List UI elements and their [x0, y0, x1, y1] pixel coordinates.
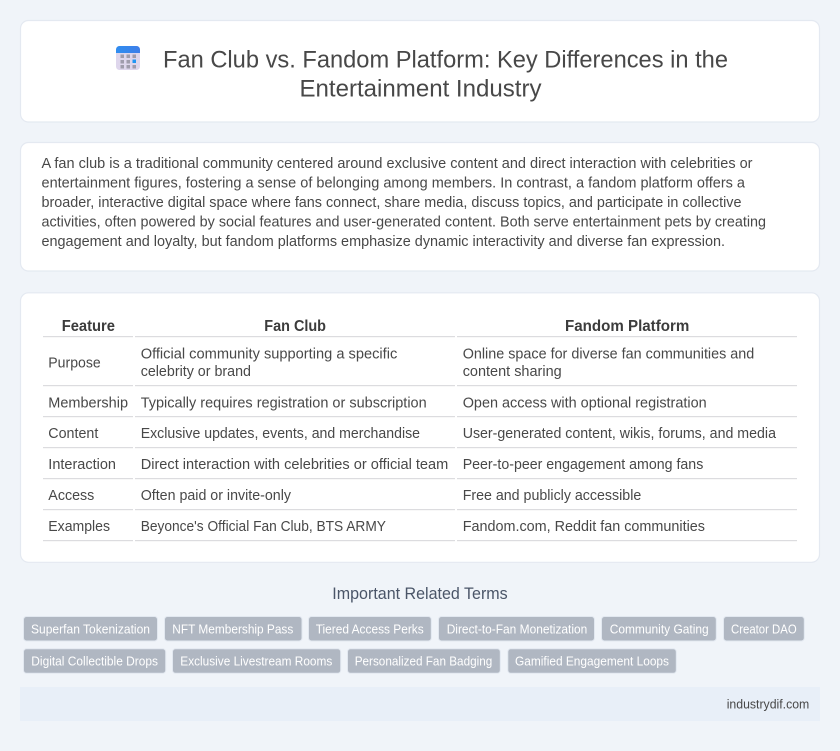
row: examples: Fandom.com, Reddit fan communities: [463, 518, 705, 535]
row: membership: Typically requires registration or subscription: [141, 394, 427, 411]
icon: calendar: [116, 46, 140, 70]
tag: Digital Collectible Drops: [31, 653, 158, 668]
row: membership: Open access with optional registration: [463, 394, 707, 411]
text block: introduction: activities, often powered by social features and user-generated content. Both serve entertainment pets by creating: [42, 214, 766, 230]
tag: Tiered Access Perks: [316, 621, 424, 636]
row: purpose: content sharing: [463, 363, 562, 380]
row: content: Content: [48, 425, 99, 442]
title: Entertainment Industry: [300, 76, 542, 102]
title: [163, 46, 728, 102]
panel: comparison table: [20, 293, 820, 562]
tag: [172, 649, 341, 673]
tag: Personalized Fan Badging: [355, 653, 492, 668]
tag list: related terms: [24, 616, 804, 673]
tag: Community Gating: [610, 621, 709, 636]
tag: [724, 616, 804, 641]
tag: [24, 649, 166, 673]
text block: introduction: [42, 155, 766, 250]
text block: introduction: entertainment figures, fostering a sense of belonging among members. In contrast, a fandom platform offers a: [42, 174, 746, 192]
row: access: Often paid or invite-only: [141, 487, 291, 504]
row: purpose: [48, 345, 754, 380]
table header row: Feature: [62, 318, 115, 335]
row: purpose: Official community supporting a specific: [141, 345, 398, 362]
tag: NFT Membership Pass: [172, 621, 293, 636]
row: examples: Beyonce's Official Fan Club, BTS ARMY: [141, 518, 386, 535]
tag: [508, 649, 676, 673]
tag: Exclusive Livestream Rooms: [180, 653, 332, 668]
table header row: Fan Club: [264, 318, 326, 335]
text block: introduction: engagement and loyalty, but fandom platforms emphasize dynamic interactivity and diverse fan expression.: [42, 233, 725, 250]
row: interaction: Interaction: [48, 456, 116, 473]
row: interaction: Peer-to-peer engagement among fans: [463, 456, 703, 473]
panel: introduction: [20, 142, 820, 271]
row: examples: [48, 518, 705, 535]
tag: [438, 616, 594, 641]
row: purpose: celebrity or brand: [141, 363, 251, 380]
row: access: [48, 487, 641, 504]
row: content: User-generated content, wikis, forums, and media: [463, 425, 777, 442]
row: membership: Membership: [48, 394, 128, 411]
row: access: Access: [48, 487, 94, 504]
table header row: Fandom Platform: [565, 318, 689, 335]
tag: [602, 616, 716, 641]
tag: [24, 616, 158, 641]
footer: [20, 687, 820, 721]
tag: Gamified Engagement Loops: [515, 653, 669, 668]
text block: introduction: broader, interactive digital space where fans connect, share media, discuss topics, and participate in collective: [42, 194, 742, 211]
row: access: Free and publicly accessible: [463, 487, 641, 504]
row: membership: [48, 394, 707, 411]
tag: [164, 616, 302, 641]
row: interaction: Direct interaction with celebrities or official team: [141, 456, 448, 473]
panel: header: [20, 20, 820, 122]
row: content: [48, 425, 777, 442]
tag: [308, 616, 431, 641]
tag: Direct-to-Fan Monetization: [447, 621, 587, 636]
row: purpose: Purpose: [48, 354, 101, 371]
row: interaction: [48, 456, 703, 473]
footer: industrydif.com: [727, 696, 809, 711]
title: Fan Club vs. Fandom Platform: Key Differences in the: [163, 46, 728, 74]
tag: Superfan Tokenization: [31, 621, 150, 636]
row: examples: Examples: [48, 518, 110, 535]
table header row: [62, 318, 689, 335]
tag: [348, 649, 500, 673]
row: content: Exclusive updates, events, and merchandise: [141, 425, 420, 442]
tag: Creator DAO: [731, 621, 797, 636]
heading: important related terms: Important Related Terms: [332, 585, 508, 603]
row: purpose: Online space for diverse fan communities and: [463, 345, 754, 362]
text block: introduction: A fan club is a traditional community centered around exclusive content and direct interaction with celebrities or: [42, 155, 753, 172]
